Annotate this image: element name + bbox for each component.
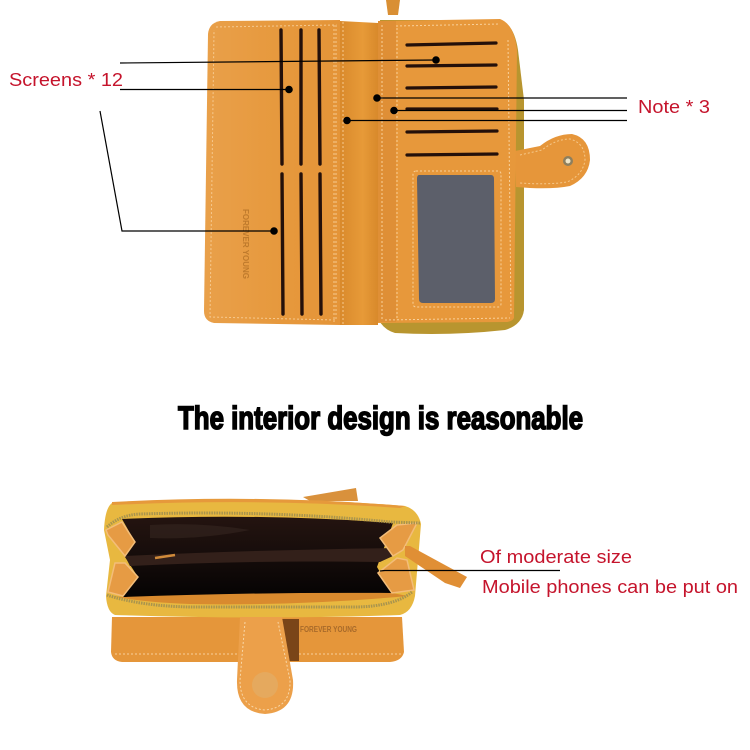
wrist strap stub — [386, 0, 400, 15]
card slots, horizontal — [407, 43, 497, 155]
annotation: Of moderate size: Of moderate size — [480, 546, 632, 567]
closure tab — [237, 617, 293, 714]
inner orange bottom lip — [112, 593, 408, 604]
open wallet: interior view — [204, 0, 590, 334]
closure tab — [515, 134, 590, 188]
zipped wallet: open compartment view — [104, 488, 467, 714]
leader lines: notes — [344, 95, 627, 124]
annotation: Note * 3 label: Note * 3 — [638, 96, 710, 117]
leader lines: screens — [100, 57, 439, 234]
interior lining — [122, 517, 393, 597]
leader line: size — [380, 570, 560, 572]
annotation: Screens * 12 label: Screens * 12 — [9, 69, 123, 90]
top strap — [303, 488, 358, 501]
annotation: Mobile phones can be put on: Mobile phones can be put on — [482, 576, 738, 597]
side gussets — [106, 522, 417, 596]
centre spine — [340, 21, 378, 325]
wallet body, yellow rim — [104, 499, 421, 618]
right card panel — [378, 19, 517, 323]
embossed brand: FOREVER YOUNG — [241, 209, 250, 279]
lower flap — [111, 617, 404, 662]
middle zip pocket — [125, 548, 395, 566]
zippers — [107, 513, 420, 607]
card slots, vertical — [281, 30, 321, 314]
ID window — [413, 171, 501, 307]
lining sheen — [150, 524, 250, 538]
lower flap: FOREVER YOUNG — [300, 625, 357, 634]
zipper edge — [380, 20, 524, 334]
left card panel — [204, 20, 340, 325]
title: The interior design is reasonable — [178, 400, 583, 436]
zipper pull — [405, 546, 467, 588]
